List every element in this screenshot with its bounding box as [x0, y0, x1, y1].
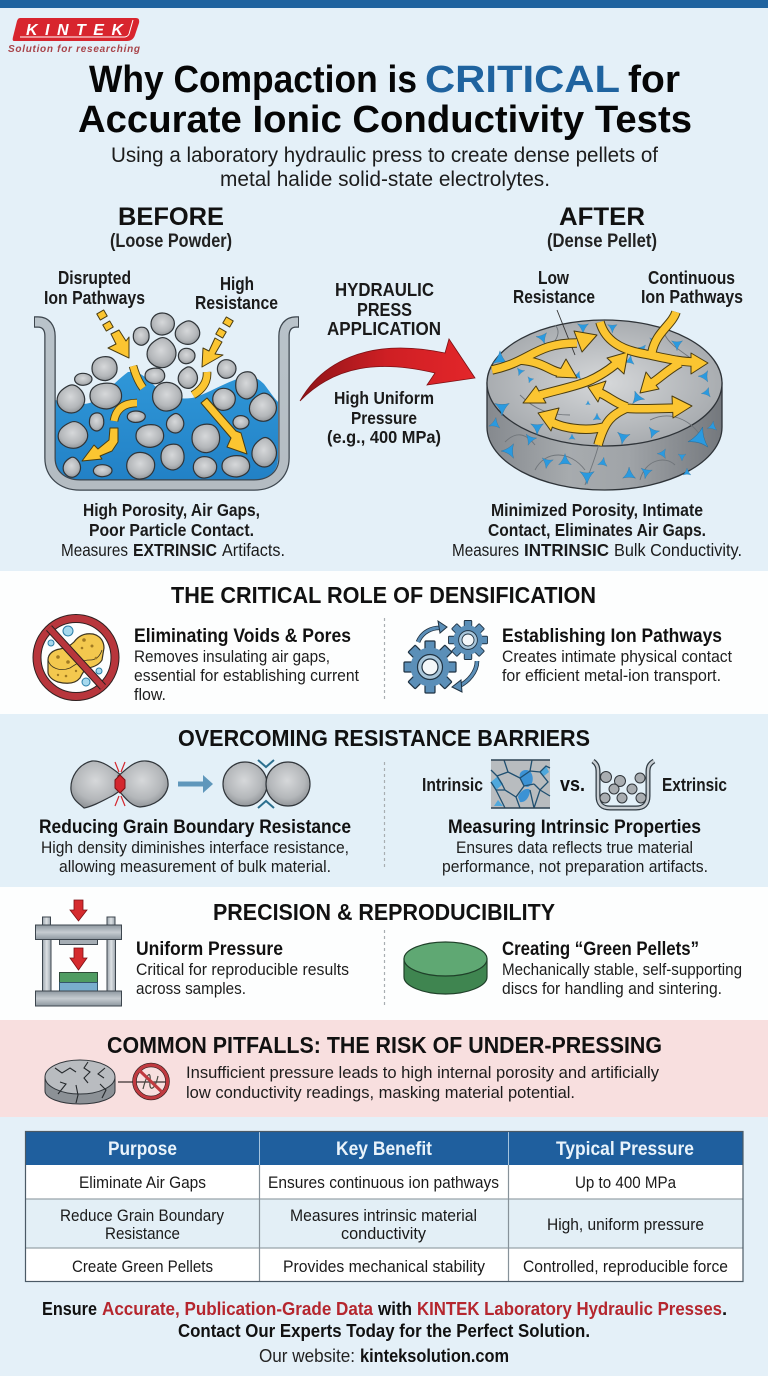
- title: Accurate Ionic Conductivity Tests: [78, 99, 692, 141]
- caption: before: EXTRINSIC: [133, 540, 217, 560]
- caption: after: Contact, Eliminates Air Gaps.: [488, 520, 706, 540]
- icon: broken ion arrows: [82, 310, 247, 461]
- table rows: Provides mechanical stability: [283, 1257, 485, 1276]
- label: disrupted ion pathways: Disrupted: [58, 268, 131, 288]
- table rows: Controlled, reproducible force: [523, 1257, 728, 1276]
- icon: cracked pellet: [45, 1060, 115, 1104]
- icon: intrinsic vs extrinsic: [422, 760, 727, 808]
- low resistance pointer: [557, 310, 575, 355]
- text: establishing ion pathways: [502, 625, 732, 685]
- text: creating green pellets: Creating “Green Pellets”: [502, 938, 699, 960]
- icon: intrinsic vs extrinsic: vs.: [560, 774, 585, 796]
- panel: overcoming resistance barriers: [0, 714, 768, 887]
- label: high uniform pressure: (e.g., 400 MPa): [327, 427, 441, 447]
- heading: resistance barriers: OVERCOMING RESISTANCE BARRIERS: [178, 725, 590, 751]
- after heading: [547, 203, 657, 252]
- subtitle: [111, 144, 658, 191]
- text: establishing ion pathways: Creates intimate physical contact: [502, 647, 732, 666]
- text: creating green pellets: Mechanically stable, self-supporting: [502, 960, 742, 979]
- text: pitfalls description: low conductivity readings, masking material potential.: [186, 1083, 575, 1102]
- icon: continuous ion arrows: [492, 312, 708, 445]
- label: high uniform pressure: High Uniform: [334, 388, 434, 408]
- text: pitfalls description: [186, 1063, 659, 1102]
- text: establishing ion pathways: for efficient metal-ion transport.: [502, 666, 721, 685]
- label: low resistance: [513, 268, 595, 307]
- title: CRITICAL: [425, 59, 620, 101]
- footer call to action: .: [722, 1298, 727, 1319]
- table rows: Create Green Pellets: [72, 1257, 213, 1276]
- subtitle: metal halide solid-state electrolytes.: [220, 168, 550, 191]
- caption: after: Measures: [452, 540, 519, 560]
- after heading: AFTER: [559, 203, 645, 231]
- text: uniform pressure: across samples.: [136, 979, 246, 998]
- panel: hydraulic press arrow: [300, 280, 475, 447]
- caption: after: Minimized Porosity, Intimate: [491, 500, 703, 520]
- label: continuous ion pathways: [641, 268, 743, 307]
- panel: common pitfalls: [0, 1020, 768, 1117]
- arrow: red curved: [300, 339, 475, 401]
- footer call to action: [42, 1298, 727, 1341]
- caption: before: Measures: [61, 540, 128, 560]
- label: low resistance: Low: [538, 268, 570, 288]
- beaker with loose powder: [34, 310, 299, 485]
- label: hydraulic press application: HYDRAULIC: [335, 280, 434, 300]
- footer call to action: KINTEK Laboratory Hydraulic Presses: [417, 1298, 722, 1319]
- table rows: Resistance: [105, 1224, 180, 1243]
- caption: after: [452, 500, 742, 560]
- icon: extrinsic beaker: [593, 761, 654, 808]
- footer call to action: with: [377, 1298, 412, 1319]
- dense pellet illustration: [487, 310, 722, 490]
- label: high resistance: [195, 274, 278, 313]
- text: uniform pressure: [136, 938, 349, 998]
- label: high resistance: High: [220, 274, 254, 294]
- text: creating green pellets: discs for handling and sintering.: [502, 979, 722, 998]
- after heading: (Dense Pellet): [547, 231, 657, 252]
- text: measuring intrinsic properties: Measuring Intrinsic Properties: [448, 816, 701, 838]
- table rows: Up to 400 MPa: [575, 1173, 676, 1192]
- text: eliminating voids: Eliminating Voids & Pores: [134, 625, 351, 647]
- label: continuous ion pathways: Continuous: [648, 268, 735, 288]
- label: high uniform pressure: Pressure: [351, 408, 417, 428]
- icon: no sponge: [37, 618, 115, 696]
- panel: after: [452, 203, 743, 560]
- title: [78, 59, 692, 141]
- text: eliminating voids: flow.: [134, 685, 166, 704]
- caption: before: Artifacts.: [222, 540, 285, 560]
- icon: gears: [404, 620, 488, 693]
- panel: before: [34, 203, 299, 560]
- heading: precision: PRECISION & REPRODUCIBILITY: [213, 899, 555, 925]
- caption: before: [61, 500, 285, 560]
- top bar: [0, 0, 768, 8]
- website line: kinteksolution.com: [360, 1346, 509, 1366]
- text: reducing grain boundary resistance: High density diminishes interface resistance,: [41, 838, 349, 857]
- before heading: (Loose Powder): [110, 231, 232, 252]
- table rows: [26, 1132, 743, 1282]
- text: reducing grain boundary resistance: allowing measurement of bulk material.: [59, 857, 331, 876]
- title: for: [628, 59, 680, 101]
- icon: grain boundary: [71, 760, 310, 808]
- icon: intrinsic vs extrinsic: Intrinsic: [422, 775, 483, 795]
- label: disrupted ion pathways: Ion Pathways: [44, 288, 145, 308]
- logo: KINTEK: [8, 18, 140, 55]
- label: hydraulic press application: PRESS: [357, 300, 412, 320]
- footer call to action: Accurate, Publication-Grade Data: [102, 1298, 374, 1319]
- panel: the critical role of densification: [0, 571, 768, 714]
- logo: KINTEK: Solution for researching: [8, 44, 140, 55]
- panel: precision and reproducibility: [0, 887, 768, 1020]
- label: hydraulic press application: APPLICATION: [327, 319, 441, 339]
- table rows: Measures intrinsic material: [290, 1206, 477, 1225]
- subtitle: Using a laboratory hydraulic press to create dense pellets of: [111, 144, 658, 167]
- text: eliminating voids: [134, 625, 359, 704]
- label: low resistance: Resistance: [513, 287, 595, 307]
- text: measuring intrinsic properties: [442, 816, 708, 876]
- caption: after: Bulk Conductivity.: [614, 540, 742, 560]
- table: summary: [26, 1132, 743, 1282]
- label: hydraulic press application: [327, 280, 441, 339]
- heading: common pitfalls: COMMON PITFALLS: THE RISK OF UNDER-PRESSING: [107, 1032, 662, 1058]
- footer call to action: Ensure: [42, 1298, 97, 1319]
- before heading: BEFORE: [118, 203, 224, 231]
- table rows: High, uniform pressure: [547, 1215, 704, 1234]
- heading: densification: THE CRITICAL ROLE OF DENSIFICATION: [171, 582, 596, 608]
- label: high resistance: Resistance: [195, 293, 278, 313]
- table header: Key Benefit: [336, 1139, 433, 1160]
- caption: after: INTRINSIC: [524, 540, 609, 560]
- text: creating green pellets: [502, 938, 742, 998]
- footer call to action: Contact Our Experts Today for the Perfect Solution.: [178, 1320, 590, 1341]
- icon: intrinsic tile: [491, 760, 550, 808]
- icon: no ion pathway: [118, 1065, 169, 1098]
- text: measuring intrinsic properties: Ensures data reflects true material: [456, 838, 693, 857]
- label: high uniform pressure: [327, 388, 441, 447]
- caption: before: Poor Particle Contact.: [89, 520, 254, 540]
- text: establishing ion pathways: Establishing Ion Pathways: [502, 625, 722, 647]
- text: uniform pressure: Uniform Pressure: [136, 938, 283, 960]
- title: Why Compaction is: [89, 59, 417, 101]
- table header: [26, 1132, 743, 1165]
- text: pitfalls description: Insufficient pressure leads to high internal porosity and artificially: [186, 1063, 659, 1082]
- icon: intrinsic vs extrinsic: Extrinsic: [662, 775, 727, 795]
- table rows: Ensures continuous ion pathways: [268, 1173, 499, 1192]
- text: uniform pressure: Critical for reproducible results: [136, 960, 349, 979]
- website line: [259, 1346, 509, 1366]
- label: disrupted ion pathways: [44, 268, 145, 308]
- table header: Purpose: [108, 1139, 177, 1160]
- label: continuous ion pathways: Ion Pathways: [641, 287, 743, 307]
- text: eliminating voids: Removes insulating air gaps,: [134, 647, 330, 666]
- icon: hydraulic press: [36, 900, 122, 1006]
- text: measuring intrinsic properties: performance, not preparation artifacts.: [442, 857, 708, 876]
- text: reducing grain boundary resistance: Reducing Grain Boundary Resistance: [39, 816, 351, 838]
- icon: green pellet: [404, 942, 487, 994]
- table rows: Reduce Grain Boundary: [60, 1206, 224, 1225]
- website line: Our website:: [259, 1346, 355, 1366]
- table header: Typical Pressure: [556, 1139, 694, 1160]
- table rows: conductivity: [341, 1224, 426, 1243]
- caption: before: High Porosity, Air Gaps,: [83, 500, 260, 520]
- text: eliminating voids: essential for establishing current: [134, 666, 359, 685]
- text: reducing grain boundary resistance: [39, 816, 351, 876]
- table rows: Eliminate Air Gaps: [79, 1173, 206, 1192]
- before heading: [110, 203, 232, 252]
- logo: KINTEK: KINTEK: [26, 22, 124, 39]
